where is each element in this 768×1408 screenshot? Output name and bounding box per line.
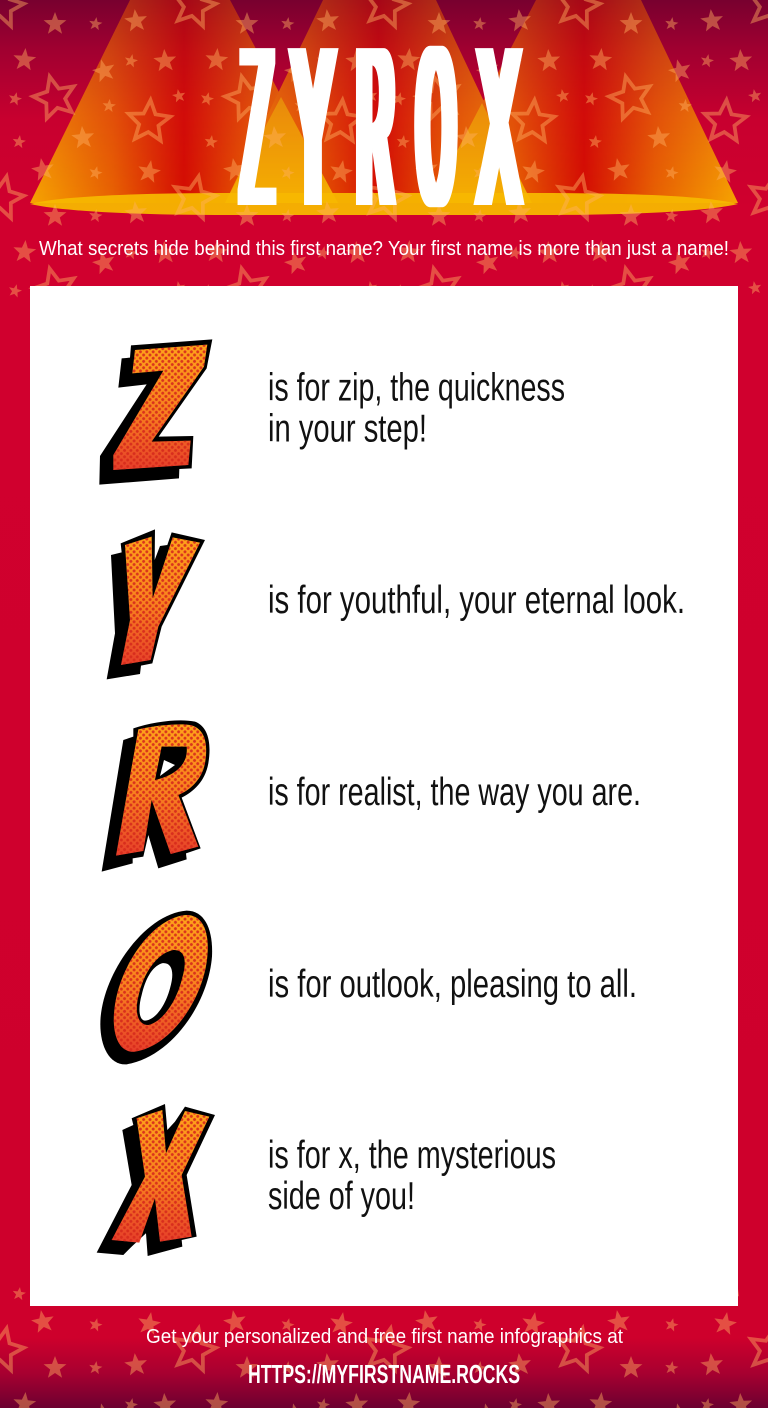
text: X line: side of you!	[268, 1175, 415, 1218]
footer link: HTTPS://MYFIRSTNAME.ROCKS	[248, 1359, 520, 1389]
icon: letter O	[100, 911, 212, 1064]
spotlight middle	[230, 0, 484, 193]
text: Z line: in your step!	[268, 408, 427, 450]
title: R	[358, 0, 393, 254]
spotlight right	[484, 0, 738, 203]
spotlight left	[30, 0, 279, 203]
icon: letter Y	[107, 529, 205, 679]
spotlight floor pools	[30, 193, 738, 215]
infographic canvas: X	[478, 0, 520, 254]
title	[242, 0, 520, 254]
text: Z line: is for zip, the quickness	[268, 366, 565, 410]
panel: white content card	[30, 286, 738, 1306]
footer text: Get your personalized and free first name infographics at	[146, 1326, 623, 1348]
spotlight overlap right	[452, 103, 527, 193]
text: X line	[268, 1134, 556, 1218]
title: Y	[292, 0, 334, 254]
title: Z	[242, 0, 272, 254]
spotlights	[30, 0, 738, 203]
icon: letter X	[97, 1104, 215, 1256]
spotlight overlap left	[230, 97, 332, 193]
star pattern bottom	[0, 1284, 768, 1408]
title: O	[418, 0, 454, 254]
icon: letter R	[102, 720, 210, 872]
star pattern top	[0, 0, 768, 300]
text: X line: is for x, the mysterious	[268, 1134, 556, 1177]
text: Z line	[268, 366, 565, 450]
text: O line: is for outlook, pleasing to all.	[268, 963, 637, 1006]
subtitle: What secrets hide behind this first name? Your first name is more than just a name!	[39, 238, 729, 260]
icon: letter Z	[99, 339, 212, 485]
text: R line: is for realist, the way you are.	[268, 771, 641, 814]
